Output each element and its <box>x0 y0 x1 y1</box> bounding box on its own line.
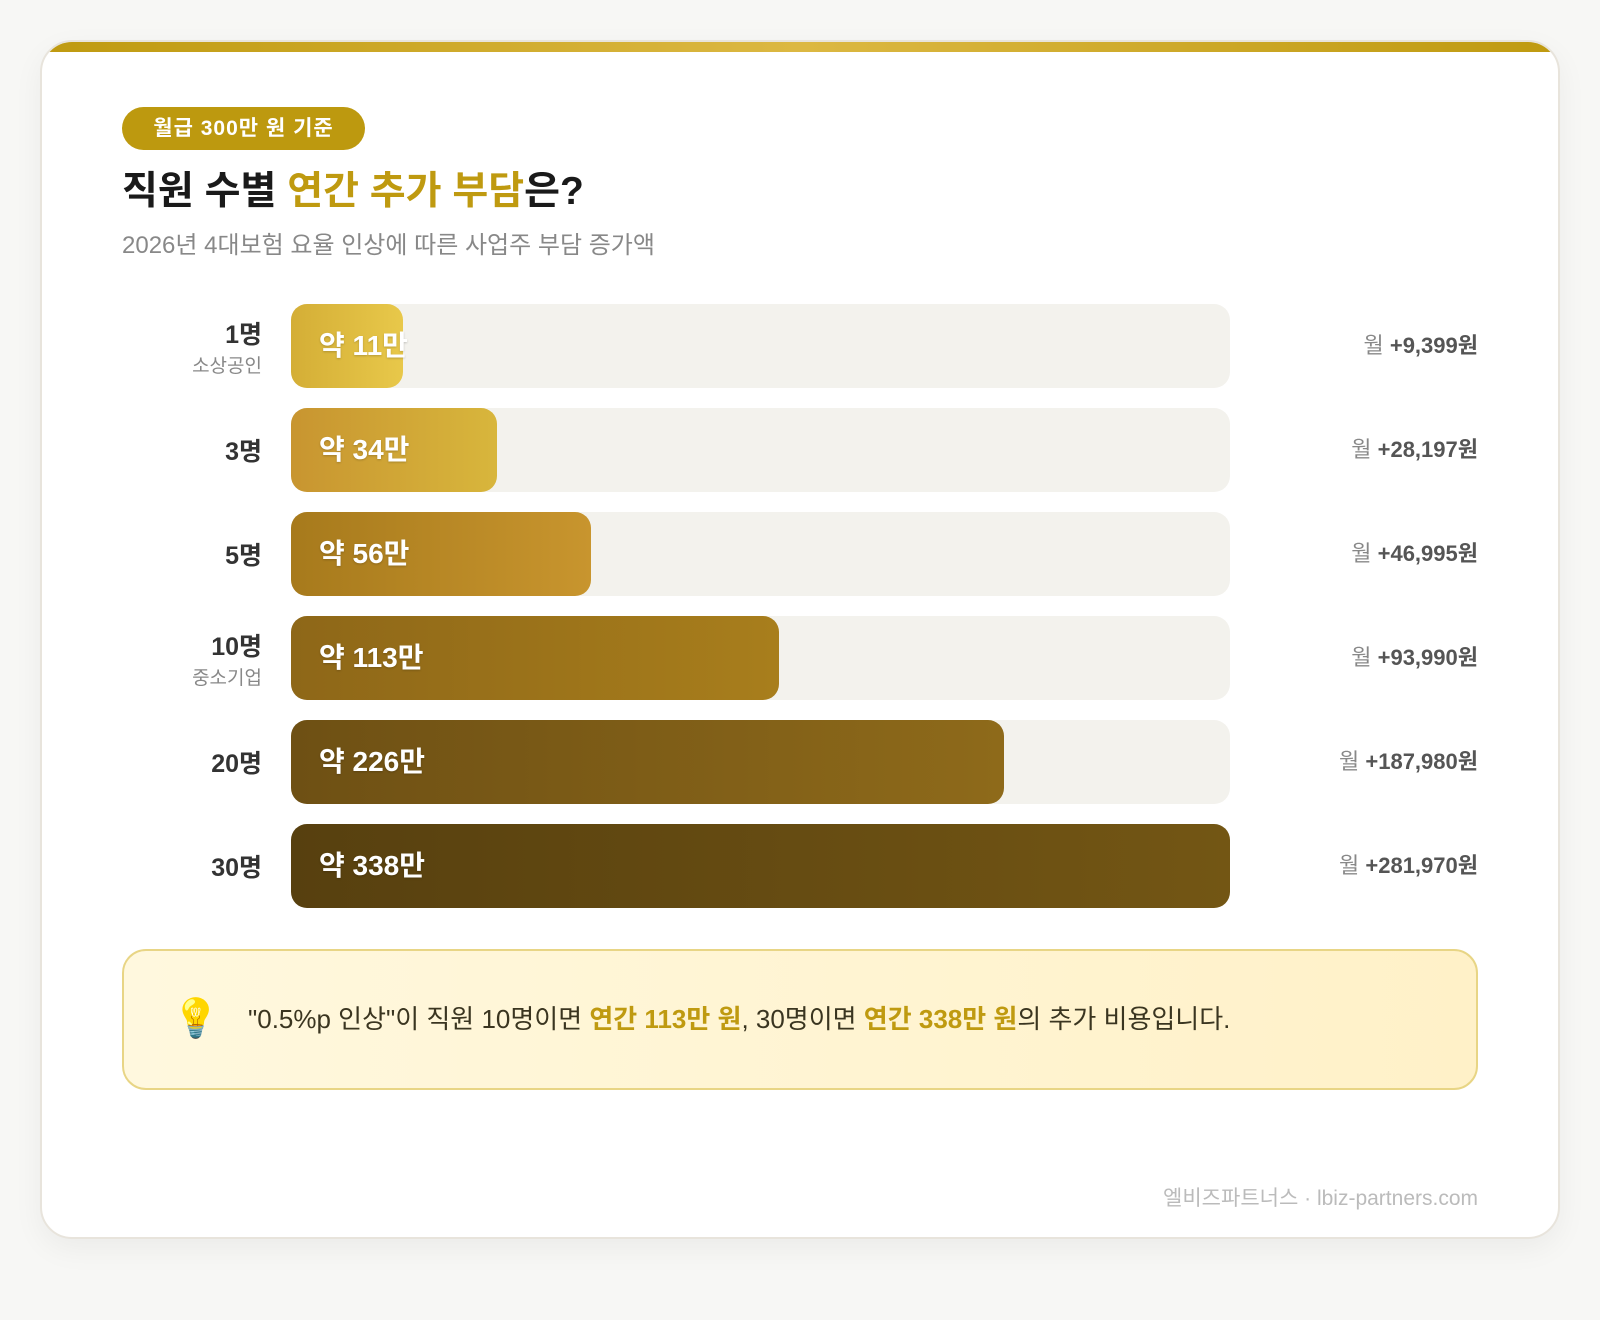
row: 1명: 소상공인 <box>192 356 262 376</box>
row: 20명: 월 +187,980원 <box>1339 749 1478 774</box>
row: 30명: 30명 <box>211 854 262 882</box>
row: 20명: 20명 <box>211 750 262 778</box>
row: 5명: 약 56만 <box>319 538 409 569</box>
callout text: "0.5%p 인상"이 직원 10명이면 연간 113만 원, 30명이면 연간 338만 원의 추가 비용입니다. <box>248 1004 1230 1034</box>
row: 1명: 1명 <box>225 320 262 348</box>
callout <box>122 949 1478 1090</box>
row: 10명 <box>192 616 1478 700</box>
row: 1명: 월 +9,399원 <box>1363 333 1478 358</box>
row: 20명: 약 226만 <box>319 746 425 777</box>
icon: light bulb: 💡 <box>172 998 219 1040</box>
row: 3명 <box>225 408 1478 492</box>
footer: 엘비즈파트너스 · lbiz-partners.com <box>1163 1187 1478 1210</box>
row: 20명 <box>211 720 1478 804</box>
subtitle: 2026년 4대보험 요율 인상에 따른 사업주 부담 증가액 <box>122 232 655 259</box>
row: 10명: 중소기업 <box>192 668 262 688</box>
row: 3명: 약 34만 <box>319 434 409 465</box>
row: 3명: 월 +28,197원 <box>1351 437 1478 462</box>
row: 10명: 월 +93,990원 <box>1351 645 1478 670</box>
badge <box>122 107 365 150</box>
row: 30명: 월 +281,970원 <box>1339 853 1478 878</box>
row: 5명: 5명 <box>225 542 262 570</box>
bar chart <box>192 304 1478 908</box>
title: 직원 수별 연간 추가 부담은? <box>122 170 584 213</box>
row: 1명 <box>192 304 1478 388</box>
row: 10명: 10명 <box>211 632 262 660</box>
row: 5명: 월 +46,995원 <box>1351 541 1478 566</box>
row: 1명: 약 11만 <box>319 330 408 361</box>
row: 5명 <box>225 512 1478 596</box>
row: 30명: 약 338만 <box>319 850 425 881</box>
row: 30명 <box>211 824 1478 908</box>
row: 10명: 약 113만 <box>319 642 423 673</box>
row: 3명: 3명 <box>225 438 262 466</box>
badge: 월급 300만 원 기준 <box>153 117 334 140</box>
